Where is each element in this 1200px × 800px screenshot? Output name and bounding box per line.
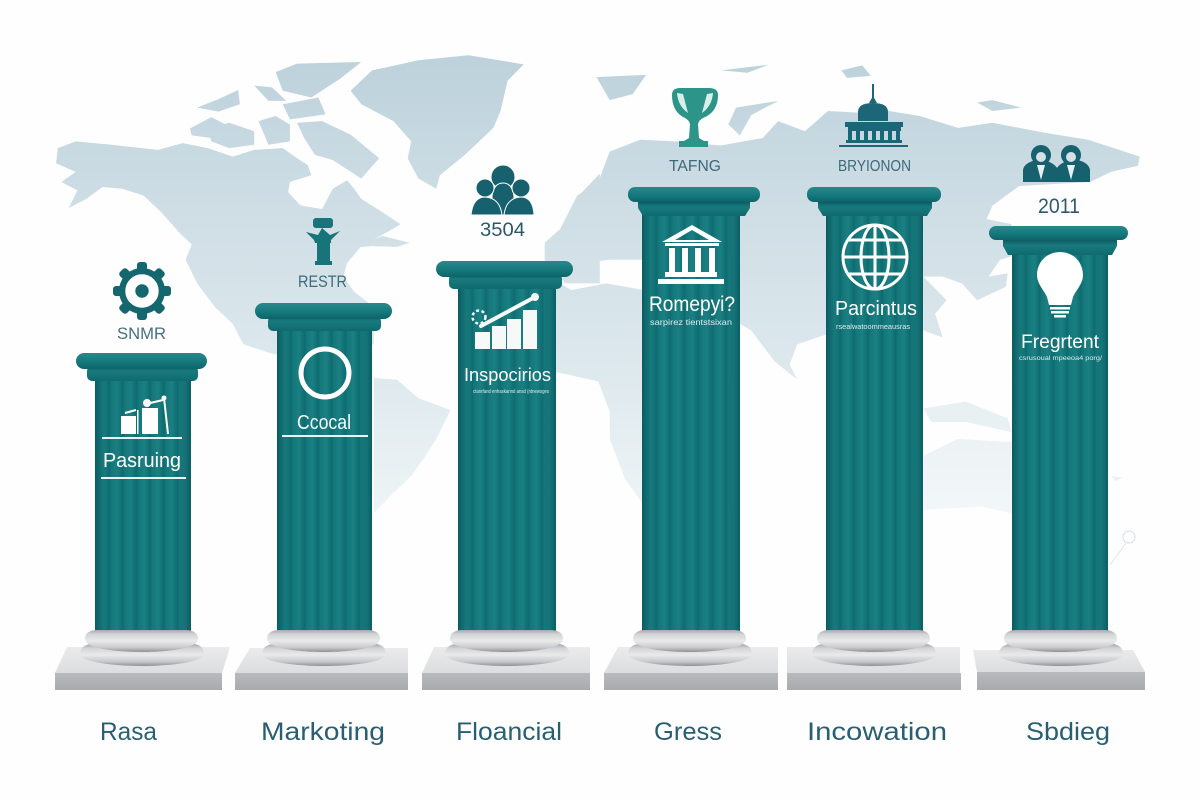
category: Gress: Gress [654, 718, 722, 746]
subtitle: csrusoual mpeeoa4 porg/ [1019, 355, 1102, 362]
world map backdrop [56, 55, 1140, 565]
label: TAFNG: TAFNG [669, 158, 721, 175]
base torus 1 [80, 630, 204, 666]
pillar 6: Sbdieg [973, 145, 1145, 746]
category: Sbdieg: Sbdieg [1026, 718, 1110, 746]
base torus 6 [999, 630, 1123, 666]
icon: growth chart [472, 293, 539, 349]
base torus 3 [445, 630, 569, 666]
category: Rasa: Rasa [100, 718, 157, 746]
rule below title [101, 477, 186, 479]
capital 5 [807, 187, 941, 216]
icon: temple [658, 225, 724, 284]
category: Incowation: Incowation [807, 718, 947, 746]
base torus 2 [262, 630, 386, 666]
label: RESTR: RESTR [298, 272, 347, 291]
capital 3 [436, 261, 573, 289]
value: 3504: 3504 [480, 220, 525, 241]
subtitle: ctanrfand enhaskannd ansd (ntnewsges [473, 389, 549, 395]
icon: ring [301, 349, 349, 397]
rule above title [102, 437, 182, 439]
rule below title [282, 435, 368, 437]
shaft 4 [642, 214, 740, 636]
capital 6 [989, 226, 1128, 255]
plinth 3 [422, 647, 590, 690]
plinth 2 [235, 648, 408, 690]
icon: trophy [672, 88, 718, 147]
subtitle: rsealwatoommeausras [836, 324, 911, 331]
pillar 1: Rasa [55, 262, 230, 746]
pillar 4: Gress [604, 88, 778, 746]
subtitle: sarpirez tientstsixan [650, 317, 732, 327]
shaft 2 [277, 329, 372, 636]
pillar 5: Incowation [787, 84, 961, 746]
base torus 5 [812, 630, 936, 666]
icon: small bar chart [121, 396, 168, 434]
plinth 5 [787, 647, 961, 690]
icon: two people [1023, 145, 1090, 182]
title: Parcintus: Parcintus [835, 298, 917, 320]
shaft 6 [1012, 253, 1108, 636]
shaft 5 [826, 214, 923, 636]
plinth 6 [973, 650, 1145, 690]
title: Ccocal: Ccocal [297, 412, 351, 434]
title: Pasruing: Pasruing [103, 450, 181, 472]
category: Floancial: Floancial [456, 718, 562, 746]
label: BRYIONON: BRYIONON [838, 158, 911, 175]
pillar 2: Markoting [235, 218, 408, 746]
shaft 1 [95, 380, 191, 636]
plinth 1 [55, 647, 230, 690]
title: Romepyi?: Romepyi? [649, 293, 735, 316]
icon: three people [471, 165, 534, 215]
pillar 3: Floancial [422, 165, 590, 746]
icon: gear [113, 262, 171, 320]
title: Fregrtent: Fregrtent [1021, 332, 1100, 353]
plinth 4 [604, 647, 778, 690]
icon: emblem above pillar [306, 218, 340, 265]
label: SNMR: SNMR [117, 324, 166, 343]
category: Markoting: Markoting [261, 718, 385, 746]
icon: globe [843, 225, 907, 289]
capital 1 [76, 353, 207, 381]
capital 4 [628, 187, 760, 216]
title: Inspocirios: Inspocirios [464, 365, 551, 385]
base torus 4 [628, 630, 752, 666]
value: 2011: 2011 [1038, 195, 1080, 218]
icon: light bulb [1037, 252, 1083, 318]
icon: domed building [839, 84, 908, 147]
shaft 3 [458, 288, 556, 636]
capital 2 [255, 303, 392, 331]
